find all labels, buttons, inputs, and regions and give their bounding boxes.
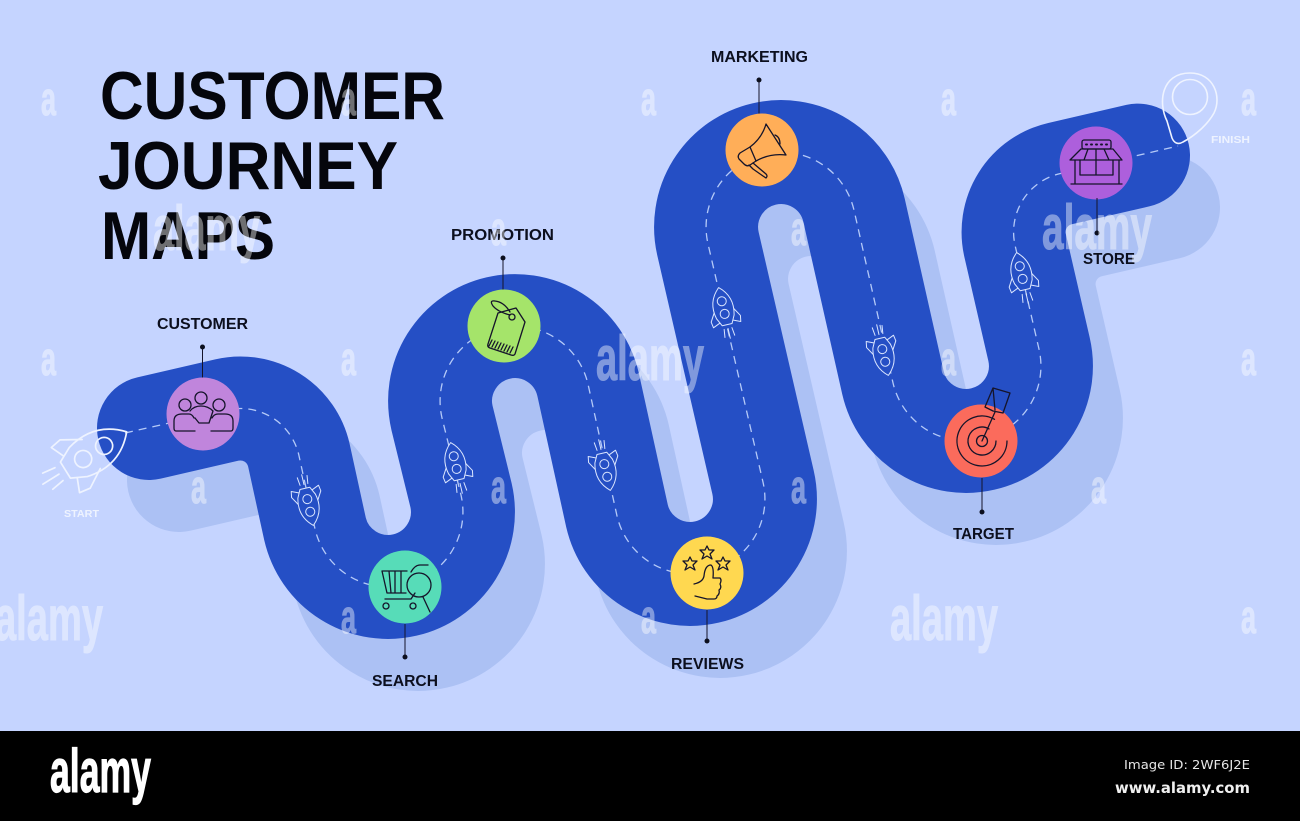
footer logo: alamy	[50, 737, 151, 805]
watermark: alamy: a	[341, 332, 356, 385]
watermark: alamy: a	[341, 590, 356, 643]
watermark: alamy: a	[1241, 332, 1256, 385]
dashed route line	[125, 146, 1178, 587]
rocket: promotion to reviews	[584, 436, 625, 494]
watermark: alamy: a	[1241, 72, 1256, 125]
watermark: alamy: a	[641, 590, 656, 643]
rocket: marketing to target	[862, 321, 903, 379]
step: marketing: MARKETING	[711, 49, 808, 66]
watermark: alamy: a	[341, 72, 356, 125]
step: reviews: REVIEWS	[671, 656, 744, 673]
step: reviews	[670, 536, 744, 673]
icon: start rocket	[28, 408, 142, 508]
watermark: alamy: a	[41, 72, 56, 125]
road shadow	[179, 204, 1168, 639]
rocket: target to store	[1002, 249, 1043, 307]
rocket: search to promotion	[436, 439, 477, 497]
title: CUSTOMER	[100, 58, 445, 134]
step: target: TARGET	[953, 526, 1015, 543]
step: target	[944, 388, 1018, 543]
step: search	[368, 550, 442, 690]
watermark: alamy: a	[1091, 460, 1106, 513]
watermark: alamy	[0, 72, 1256, 654]
footer bar	[0, 731, 1300, 821]
step: store	[1060, 126, 1135, 268]
title: JOURNEY	[98, 128, 398, 204]
step: promotion	[451, 227, 554, 362]
watermark: alamy: a	[941, 72, 956, 125]
step: search: SEARCH	[372, 673, 438, 690]
finish label: FINISH	[1211, 134, 1250, 146]
step: store: STORE	[1083, 251, 1135, 268]
watermark: alamy: a	[791, 460, 806, 513]
watermark: alamy: alamy	[1042, 193, 1152, 263]
rocket: reviews to marketing	[704, 284, 745, 342]
step: promotion: PROMOTION	[451, 227, 554, 244]
watermark: alamy: alamy	[890, 584, 998, 654]
watermark: alamy: alamy	[0, 584, 103, 654]
watermark: alamy: a	[491, 460, 506, 513]
step: customer: CUSTOMER	[157, 316, 248, 333]
step: customer	[157, 316, 248, 450]
watermark: alamy: a	[791, 202, 806, 255]
icon: finish pin	[1163, 73, 1217, 143]
start label: START	[64, 508, 100, 520]
watermark: alamy: a	[491, 202, 506, 255]
road	[149, 152, 1138, 587]
watermark: alamy: a	[41, 332, 56, 385]
title: MAPS	[101, 198, 275, 274]
rocket: customer to search	[287, 471, 328, 529]
watermark: alamy: alamy	[596, 324, 704, 394]
watermark: alamy: a	[941, 332, 956, 385]
step: marketing	[711, 49, 808, 186]
website: www.alamy.com	[1115, 779, 1250, 797]
watermark: alamy: alamy	[153, 194, 260, 264]
watermark: alamy: a	[641, 72, 656, 125]
watermark: alamy: a	[191, 460, 206, 513]
title	[98, 58, 445, 274]
image id: Image ID: 2WF6J2E	[1124, 757, 1250, 772]
watermark: alamy: a	[1241, 590, 1256, 643]
